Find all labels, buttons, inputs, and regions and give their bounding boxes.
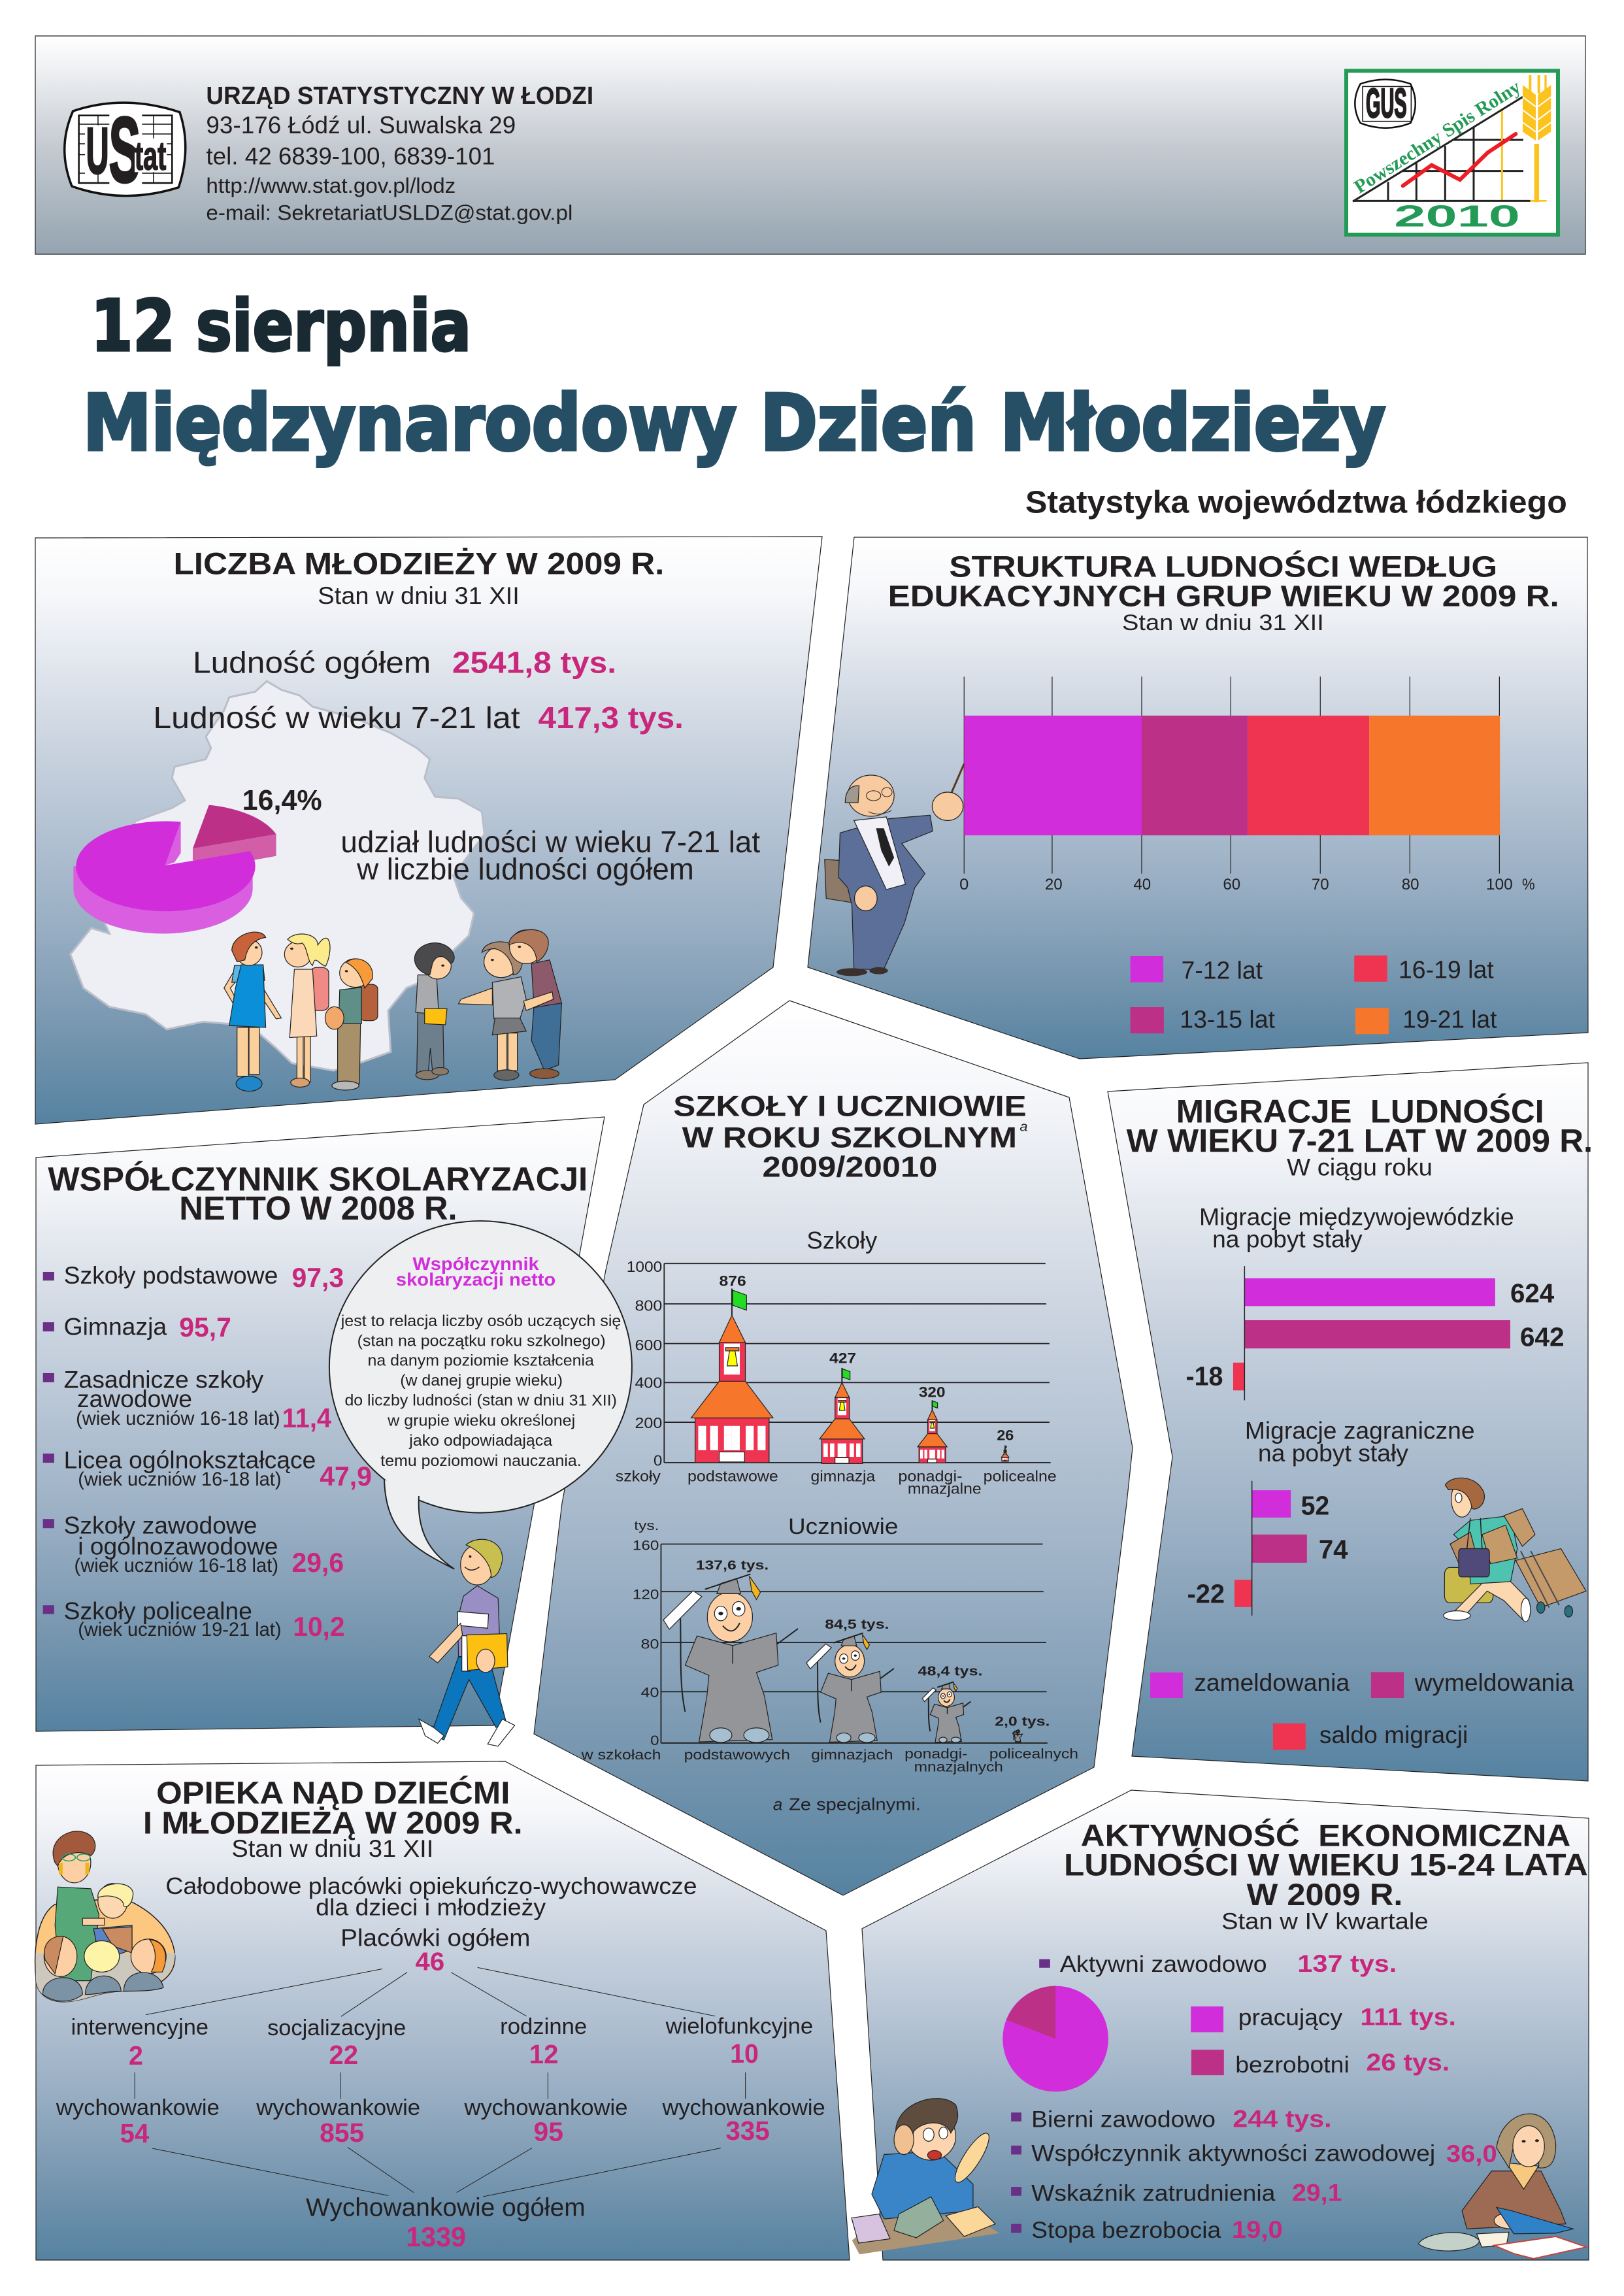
period note: Stan w IV kwartale [1221, 1908, 1429, 1934]
heading [143, 1776, 523, 1840]
legend: unemployed [1191, 2049, 1450, 2078]
pictorial chart: schools: 800 [635, 1298, 662, 1314]
pictorial chart: pupils: 40 [641, 1685, 659, 1700]
stat: economically active: Aktywni zawodowo [1060, 1951, 1267, 1977]
list: vocational schools: Szkoły zawodowe [64, 1512, 257, 1539]
bar chart: interprovincial: 624 [1510, 1279, 1555, 1308]
list: basic vocational: 11,4 [282, 1403, 332, 1433]
logo: Urząd Statystyczny [65, 99, 186, 202]
pictorial chart: pupils: podstawowych [684, 1747, 790, 1763]
heading [1127, 1092, 1593, 1159]
illustration: carer with children [35, 1831, 175, 2002]
logo: Urząd Statystyczny: U [86, 114, 109, 188]
heading [888, 550, 1559, 613]
logo: Powszechny Spis Rolny 2010: Powszechny Spis Rolny [1351, 76, 1525, 198]
stacked bar chart: 40 [1133, 876, 1151, 893]
panel: struktura ludności [808, 537, 1588, 1059]
panel: współczynnik skolaryzacji [36, 1117, 605, 1731]
stat: employment rate: Wskaźnik zatrudnienia [1031, 2180, 1276, 2206]
stat: activity rate: 36,0 [1446, 2140, 1497, 2168]
callout: definition speech bubble: jest to relacja liczby osób uczących się [340, 1312, 621, 1330]
flow diagram: institutions and residents: 10 [730, 2039, 759, 2069]
stacked bar chart: % [1522, 876, 1535, 893]
stacked bar chart: 60 [1223, 876, 1240, 893]
flow diagram: institutions and residents: Placówki ogółem [340, 1924, 530, 1952]
list: post-secondary: Szkoły policealne [64, 1597, 252, 1624]
list: general high schools: Licea ogólnokształcące [64, 1446, 316, 1473]
pie chart [1003, 1986, 1108, 2091]
stat: unemployment rate: Stopa bezrobocia [1031, 2217, 1221, 2243]
callout: definition speech bubble: w grupie wieku określonej [387, 1412, 575, 1429]
legend: saldo migracji [1319, 1722, 1468, 1748]
subheading: interprovincial: na pobyt stały [1212, 1225, 1363, 1252]
stacked bar chart: 80 [1402, 876, 1419, 893]
stacked bar chart: 70 [1312, 876, 1329, 893]
list: post-secondary: 10,2 [293, 1611, 344, 1642]
bar chart: foreign: 74 [1319, 1535, 1348, 1565]
share description [340, 825, 761, 886]
pictorial chart: schools: 427 [829, 1350, 856, 1367]
stacked bar chart: 100 [1486, 876, 1513, 893]
flow diagram: institutions and residents [56, 1924, 825, 2252]
chart title: pupils: Uczniowie [788, 1514, 898, 1539]
list: general high schools [43, 1446, 372, 1491]
legend: employed: pracujący [1238, 2004, 1343, 2030]
pictorial chart: pupils: policealnych [989, 1746, 1078, 1762]
list: post-secondary: (wiek uczniów 19-21 lat) [78, 1619, 282, 1640]
legend: 16-19 lat [1399, 956, 1494, 984]
child: boy with backpack [325, 959, 378, 1090]
legend: unemployed: bezrobotni [1235, 2052, 1350, 2078]
heading: MIGRACJE LUDNOŚCI [1176, 1092, 1544, 1130]
flow diagram: institutions and residents: interwencyjne [71, 2014, 208, 2039]
heading: LICZBA MŁODZIEŻY W 2009 R. [173, 546, 664, 581]
list: basic vocational: (wiek uczniów 16-18 lat) [76, 1408, 280, 1429]
stat: inactive: Bierni zawodowo [1031, 2106, 1216, 2132]
stat: inactive: 244 tys. [1233, 2105, 1332, 2133]
flow diagram: institutions and residents: wychowankowie [256, 2095, 420, 2120]
flow diagram: institutions and residents: wychowankowie [464, 2095, 627, 2120]
flow diagram: institutions and residents: wychowankowie [56, 2095, 220, 2120]
heading: W ROKU SZKOLNYM [682, 1122, 1017, 1154]
child: dark-haired boy [414, 943, 454, 1080]
bar chart: foreign [1187, 1481, 1348, 1616]
pictorial chart: pupils: w szkołach [581, 1747, 661, 1763]
list: basic vocational [43, 1366, 332, 1433]
flow diagram: institutions and residents: 335 [725, 2116, 770, 2146]
list: basic vocational: Zasadnicze szkoły [64, 1366, 264, 1393]
callout: definition speech bubble: jako odpowiadająca [408, 1432, 553, 1450]
heading: SZKOŁY I UCZNIOWIE [673, 1090, 1027, 1123]
subheading: foreign: na pobyt stały [1258, 1440, 1409, 1467]
pictorial chart: schools: 600 [635, 1337, 662, 1354]
pictorial chart: pupils: 0 [650, 1733, 659, 1748]
stat: economically active: 137 tys. [1297, 1950, 1397, 1977]
flow diagram: institutions and residents: wychowankowie [662, 2095, 825, 2120]
institution address: http://www.stat.gov.pl/lodz [206, 173, 456, 197]
population aged 7-21: 417,3 tys. [539, 701, 684, 735]
flow diagram: institutions and residents: wielofunkcyjne [665, 2013, 813, 2038]
panel: szkoły i uczniowie [534, 1001, 1133, 1895]
heading: W WIEKU 7-21 LAT W 2009 R. [1127, 1123, 1593, 1159]
pictorial chart: schools: mnazjalne [908, 1480, 982, 1497]
period note: W ciągu roku [1287, 1154, 1433, 1181]
total population: Ludność ogółem [193, 646, 431, 680]
pictorial chart: pupils: mnazjalnych [914, 1759, 1003, 1775]
pictorial chart: pupils: 48,4 tys. [918, 1664, 982, 1678]
pictorial chart: pupils: 160 [633, 1538, 659, 1553]
legend: unemployed: 26 tys. [1366, 2049, 1450, 2076]
logo: Powszechny Spis Rolny 2010 [1346, 71, 1558, 235]
title: main: Międzynarodowy Dzień Młodzieży [83, 378, 1385, 468]
flow diagram: institutions and residents: socjalizacyjne [267, 2015, 406, 2040]
panel: liczba młodzieży [35, 537, 822, 1124]
subheading: dla dzieci i młodzieży [316, 1895, 546, 1921]
list: vocational schools: (wiek uczniów 16-18 lat) [75, 1555, 278, 1576]
heading: W 2009 R. [1247, 1877, 1402, 1912]
pictorial chart: schools: 26 [997, 1428, 1014, 1444]
pictorial chart: schools: gimnazja [810, 1468, 876, 1485]
callout: definition speech bubble: skolaryzacji netto [396, 1269, 555, 1289]
bar chart: foreign: 52 [1301, 1491, 1329, 1521]
header band: e-mail: SekretariatUSLDZ@stat.gov.pl [206, 201, 572, 225]
flow diagram: institutions and residents: 855 [320, 2119, 364, 2148]
heading [1064, 1818, 1588, 1912]
list: vocational schools [43, 1512, 344, 1578]
list: vocational schools: i ogólnozawodowe [78, 1533, 278, 1559]
pictorial chart: pupils [581, 1518, 1078, 1775]
legend: employed: 111 tys. [1360, 2003, 1456, 2031]
list: general high schools: 47,9 [320, 1461, 372, 1491]
stat: activity rate: Współczynnik aktywności zawodowej [1031, 2140, 1435, 2166]
legend [1131, 956, 1497, 1034]
legend: 13-15 lat [1180, 1006, 1275, 1033]
heading [48, 1161, 588, 1227]
stat: employment rate: 29,1 [1292, 2179, 1342, 2206]
stacked bar chart: 20 [1045, 876, 1063, 893]
header band [35, 36, 1585, 254]
list: primary schools [43, 1262, 344, 1293]
flow diagram: institutions and residents: 12 [529, 2040, 558, 2069]
callout: definition speech bubble [329, 1221, 632, 1569]
list: lower secondary [43, 1312, 231, 1342]
panel: opieka [35, 1761, 850, 2260]
illustration: traveller with luggage [1444, 1478, 1586, 1622]
panel: migracje [1108, 1063, 1593, 1781]
pictorial chart: schools [616, 1259, 1057, 1497]
subheading: foreign [1245, 1417, 1475, 1467]
callout: definition speech bubble: (w danej grupie wieku) [400, 1372, 563, 1389]
bar chart: interprovincial: 642 [1520, 1323, 1565, 1352]
legend [1150, 1669, 1574, 1750]
heading: 2009/20010 [763, 1151, 937, 1184]
legend: zameldowania [1194, 1669, 1350, 1696]
list: lower secondary: 95,7 [179, 1312, 231, 1342]
heading: I MŁODZIEŻĄ W 2009 R. [143, 1806, 523, 1840]
illustration: walking student [419, 1539, 515, 1746]
callout: definition speech bubble: temu poziomowi nauczania. [380, 1452, 582, 1470]
list: primary schools: Szkoły podstawowe [64, 1262, 278, 1289]
header band: 93-176 Łódź ul. Suwalska 29 [206, 112, 516, 139]
pictorial chart: schools: podstawowe [688, 1468, 778, 1485]
pictorial chart: schools: 400 [635, 1375, 662, 1391]
header band: tel. 42 6839-100, 6839-101 [206, 142, 495, 170]
date note: Stan w dniu 31 XII [1122, 610, 1324, 635]
pictorial chart: pupils: 84,5 tys. [825, 1617, 889, 1632]
subheading: foreign: Migracje zagraniczne [1245, 1417, 1475, 1444]
callout: definition speech bubble: na danym poziomie kształcenia [368, 1352, 594, 1369]
illustration: group of children [224, 929, 561, 1091]
total population: 2541,8 tys. [452, 646, 616, 680]
heading: a [1019, 1119, 1028, 1134]
date note: Stan w dniu 31 XII [231, 1835, 433, 1862]
stacked bar chart: 0 [959, 876, 969, 893]
population aged 7-21: Ludność w wieku 7-21 lat [153, 701, 520, 735]
list: vocational schools: 29,6 [291, 1547, 344, 1578]
flow diagram: institutions and residents: 1339 [406, 2221, 466, 2252]
child: girl in blue [224, 932, 281, 1091]
pictorial chart: pupils: 120 [633, 1587, 659, 1602]
heading: NETTO W 2008 R. [179, 1190, 457, 1227]
panel: aktywność ekonomiczna [852, 1790, 1589, 2260]
subheading: Całodobowe placówki opiekuńczo-wychowawcze [165, 1873, 697, 1899]
subheading: interprovincial [1199, 1203, 1514, 1252]
list: lower secondary: Gimnazja [64, 1313, 167, 1340]
legend: employed [1191, 2003, 1456, 2032]
legend: 7-12 lat [1182, 957, 1263, 985]
flow diagram: institutions and residents: Wychowankowie ogółem [306, 2193, 586, 2222]
map: województwo łódzkie [71, 681, 484, 1071]
heading: OPIEKA NĄD DZIEĆMI [156, 1776, 510, 1810]
pictorial chart: pupils: tys. [634, 1518, 659, 1533]
subheading [165, 1873, 697, 1921]
list: general high schools: (wiek uczniów 16-18 lat) [78, 1469, 282, 1490]
logo: Urząd Statystyczny: tat [135, 133, 166, 178]
bar chart: interprovincial: -18 [1186, 1362, 1223, 1391]
list: post-secondary [43, 1597, 344, 1642]
legend: 19-21 lat [1402, 1006, 1497, 1033]
pictorial chart: schools: 1000 [627, 1259, 662, 1275]
pictorial chart: schools: 0 [654, 1452, 662, 1469]
chart title: schools: Szkoły [806, 1227, 878, 1254]
illustration: teacher with pointer [825, 764, 964, 976]
flow diagram: institutions and residents: 95 [534, 2118, 563, 2147]
flow diagram: institutions and residents: 2 [129, 2042, 143, 2071]
institution address [206, 82, 593, 225]
callout: definition speech bubble: (stan na początku roku szkolnego) [357, 1332, 606, 1350]
footnote: a [773, 1795, 782, 1814]
date note: Stan w dniu 31 XII [318, 583, 520, 609]
share value: 16,4% [242, 784, 322, 816]
pictorial chart: pupils: 137,6 tys. [696, 1558, 769, 1572]
logo: Powszechny Spis Rolny 2010: GUS [1366, 80, 1407, 126]
header band: URZĄD STATYSTYCZNY W ŁODZI [206, 82, 593, 109]
stat: unemployment rate: 19,0 [1232, 2216, 1283, 2244]
illustration: person on telephones [852, 2099, 999, 2254]
heading [673, 1090, 1028, 1184]
pictorial chart: pupils: ponadgi- [904, 1746, 967, 1762]
pictorial chart: pupils: 80 [641, 1637, 659, 1652]
logo: Urząd Statystyczny: S [109, 99, 141, 202]
share description: udział ludności w wieku 7-21 lat [340, 825, 761, 859]
footnote: Ze specjalnymi. [789, 1795, 921, 1814]
pictorial chart: pupils: gimnazjach [811, 1747, 893, 1763]
logo: Powszechny Spis Rolny 2010: 2010 [1394, 199, 1520, 233]
pictorial chart: schools: policealne [984, 1468, 1057, 1485]
stacked bar chart [959, 676, 1535, 893]
pictorial chart: pupils: 2,0 tys. [995, 1714, 1050, 1729]
callout: definition speech bubble: Współczynnik [412, 1254, 539, 1274]
bar chart: foreign: -22 [1187, 1580, 1225, 1609]
child: boy in mauve [509, 929, 561, 1078]
pictorial chart: schools: ponadgi- [898, 1468, 963, 1485]
pictorial chart: schools: 200 [635, 1415, 662, 1431]
panel content: współczynnik skolaryzacji [43, 1161, 632, 1746]
pictorial chart: schools: 876 [720, 1273, 746, 1289]
subheading: interprovincial: Migracje międzywojewódzkie [1199, 1203, 1514, 1230]
bar chart: interprovincial [1186, 1266, 1565, 1401]
child: girl in grey [459, 942, 526, 1080]
illustration: student with books [1419, 2114, 1587, 2259]
callout: definition speech bubble: do liczby ludności (stan w dniu 31 XII) [344, 1392, 617, 1410]
heading: WSPÓŁCZYNNIK SKOLARYZACJI [48, 1161, 588, 1198]
pictorial chart: schools: 320 [919, 1384, 945, 1401]
3D pie chart [73, 805, 276, 934]
share description: w liczbie ludności ogółem [356, 852, 694, 886]
flow diagram: institutions and residents: 46 [416, 1948, 444, 1976]
flow diagram: institutions and residents: 54 [120, 2120, 149, 2148]
pictorial chart: schools: szkoły [616, 1468, 661, 1485]
list: primary schools: 97,3 [291, 1262, 344, 1293]
legend: wymeldowania [1414, 1669, 1574, 1696]
flow diagram: institutions and residents: rodzinne [500, 2014, 587, 2038]
title: date: 12 sierpnia [91, 286, 471, 367]
child: blonde girl [284, 934, 330, 1087]
list: basic vocational: zawodowe [77, 1386, 192, 1412]
flow diagram: institutions and residents: 22 [329, 2041, 358, 2070]
